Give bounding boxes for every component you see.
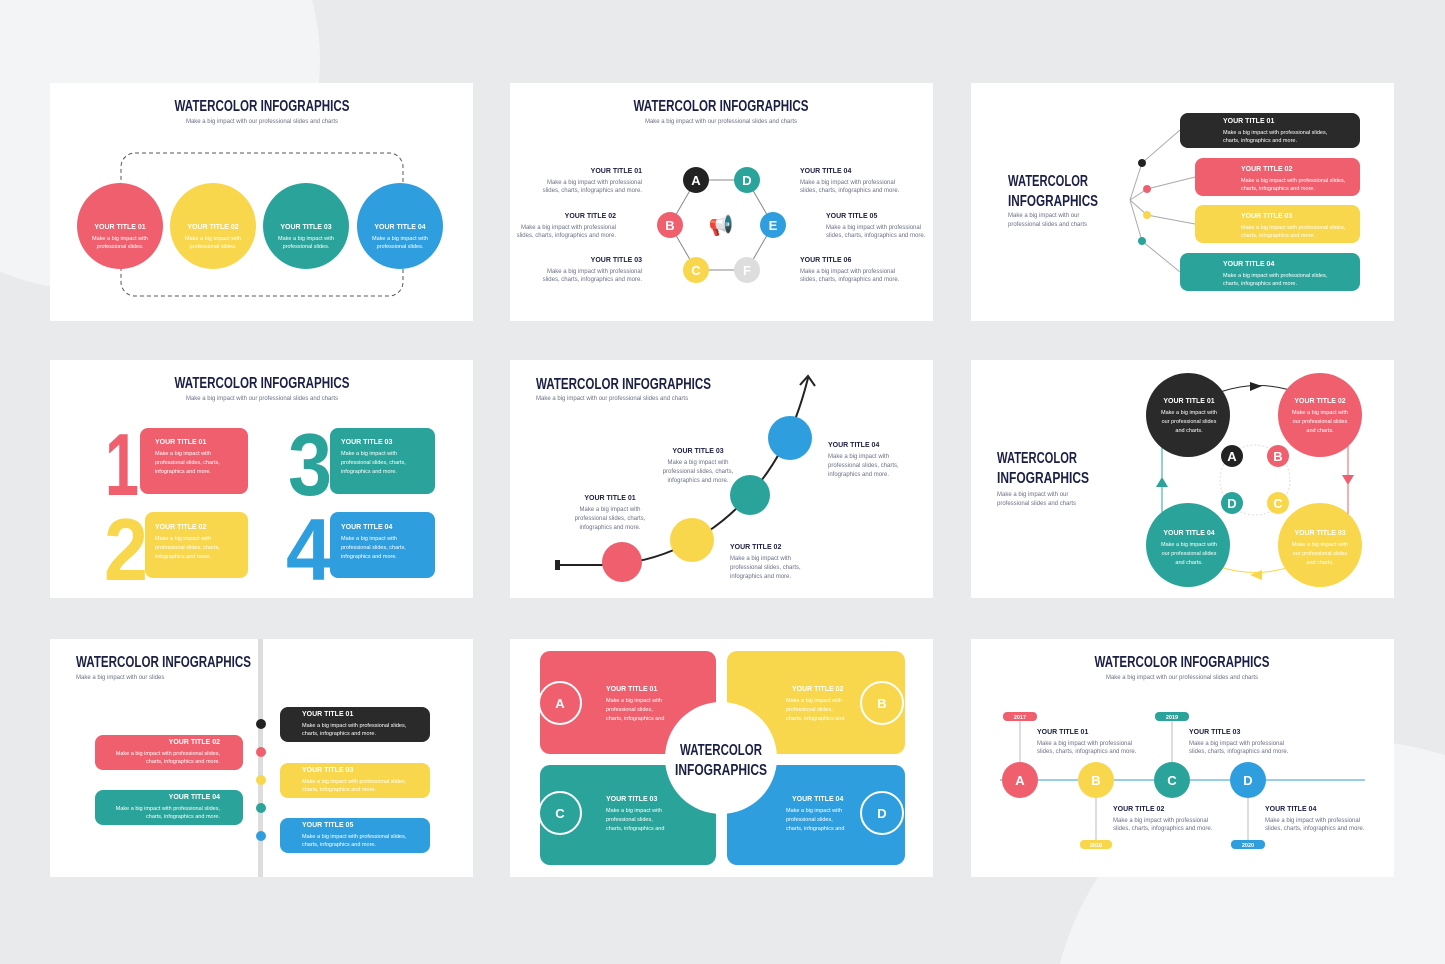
slide 5: growth curve: infographics and more. xyxy=(579,525,641,531)
slide 7: vertical timeline: Make a big impact with our slides xyxy=(76,675,164,681)
slide 7: vertical timeline: Make a big impact with professional slides, xyxy=(302,779,407,785)
slide 4: numbers: infographics and more. xyxy=(155,554,211,560)
slide 3: brush list: charts, infographics and more. xyxy=(1241,186,1315,192)
slide 6: cycle: professional slides and charts xyxy=(997,501,1076,507)
slide 9: horizontal timeline xyxy=(971,639,1394,877)
slide 9: horizontal timeline: C xyxy=(1167,773,1177,788)
slide 6: cycle: YOUR TITLE 02 xyxy=(1294,398,1346,405)
slide 4: numbers xyxy=(50,360,473,599)
slide 7: vertical timeline: YOUR TITLE 03 xyxy=(302,767,353,774)
slide 7: vertical timeline: Make a big impact with professional slides, xyxy=(302,834,407,840)
slide 5: growth curve: Make a big impact with xyxy=(730,556,791,562)
slide 4: numbers: 3 xyxy=(288,415,332,514)
slide 2: hexagon: YOUR TITLE 03 xyxy=(591,257,642,264)
slide 3: brush list: charts, infographics and more. xyxy=(1223,281,1297,287)
slide 5: growth curve: infographics and more. xyxy=(667,478,729,484)
slide 4: numbers: 2 xyxy=(104,500,148,599)
slide 9: horizontal timeline: slides, charts, infographics and more. xyxy=(1113,826,1213,832)
slide 2: hexagon: Make a big impact with professional xyxy=(800,269,895,275)
slide 4: numbers: Make a big impact with xyxy=(341,536,397,542)
slide 5: growth curve: professional slides, charts, xyxy=(663,469,734,475)
slide 9: horizontal timeline: YOUR TITLE 01 xyxy=(1037,729,1088,736)
slide 2: hexagon: slides, charts, infographics and more. xyxy=(826,233,926,239)
slide 5: growth curve: professional slides, charts, xyxy=(575,516,646,522)
slide 4: numbers: infographics and more. xyxy=(155,469,211,475)
slide 5: growth curve: Make a big impact with xyxy=(667,460,729,466)
slide 2: hexagon: slides, charts, infographics and more. xyxy=(543,188,642,194)
slide 6: cycle: Make a big impact with our xyxy=(997,492,1068,498)
slide 3: brush list: professional slides and charts xyxy=(1008,222,1087,228)
slide 7: vertical timeline: YOUR TITLE 01 xyxy=(302,711,353,718)
slide 6: cycle: Make a big impact with xyxy=(1292,542,1348,548)
slide 4: numbers: 4 xyxy=(286,500,332,599)
slide 9: horizontal timeline: Make a big impact with professional xyxy=(1113,818,1208,824)
slide 8: quadrants: professional slides, xyxy=(606,707,653,713)
slide 6: cycle: Make a big impact with xyxy=(1161,542,1217,548)
slide 4: numbers: YOUR TITLE 02 xyxy=(155,524,206,531)
slide 3: brush list xyxy=(971,83,1394,321)
slide 2: hexagon: WATERCOLOR INFOGRAPHICS xyxy=(634,98,809,115)
slide 2: hexagon: D xyxy=(742,173,752,188)
slide 8: quadrants: charts, infographics and xyxy=(786,716,844,722)
slide 9: horizontal timeline: A xyxy=(1015,773,1025,788)
slide 6: cycle: Make a big impact with xyxy=(1292,410,1348,416)
slide 2: hexagon: A xyxy=(691,173,701,188)
slide 1: four circles: YOUR TITLE 01 xyxy=(94,224,146,231)
slide 6: cycle xyxy=(971,360,1394,598)
slide 3: brush list: charts, infographics and more. xyxy=(1241,233,1315,239)
slide 1: four circles: YOUR TITLE 04 xyxy=(374,224,426,231)
slide 7: vertical timeline: charts, infographics and more. xyxy=(146,814,220,820)
slide 7: vertical timeline: Make a big impact with professional slides, xyxy=(116,751,220,757)
slide 4: numbers: YOUR TITLE 03 xyxy=(341,439,392,446)
slide 3: brush list: charts, infographics and more. xyxy=(1223,138,1297,144)
slide 6: cycle: YOUR TITLE 04 xyxy=(1163,530,1215,537)
slide 9: horizontal timeline: YOUR TITLE 03 xyxy=(1189,729,1240,736)
slide 4: numbers: professional slides, charts, xyxy=(341,460,406,466)
slide 7: vertical timeline: WATERCOLOR INFOGRAPHICS xyxy=(76,654,251,671)
slide 8: quadrants: C xyxy=(555,806,565,821)
slide 2: hexagon: YOUR TITLE 02 xyxy=(565,213,616,220)
slide 6: cycle: and charts. xyxy=(1306,560,1334,566)
slide 6: cycle: and charts. xyxy=(1175,428,1203,434)
slide 2: hexagon: Make a big impact with professional xyxy=(547,180,642,186)
slide 7: vertical timeline: YOUR TITLE 02 xyxy=(169,739,220,746)
slide 4: numbers: YOUR TITLE 01 xyxy=(155,439,206,446)
slide 1: four circles: professional slides. xyxy=(97,244,144,250)
slide 3: brush list: YOUR TITLE 01 xyxy=(1223,118,1274,125)
slide 6: cycle: Make a big impact with xyxy=(1161,410,1217,416)
slide 2: hexagon: slides, charts, infographics and more. xyxy=(517,233,616,239)
slide 5: growth curve: infographics and more. xyxy=(828,472,889,478)
slide 1: four circles: Make a big impact with xyxy=(278,236,334,242)
slide 4: numbers: Make a big impact with xyxy=(341,451,397,457)
slide 3: brush list: YOUR TITLE 04 xyxy=(1223,261,1274,268)
slide 8: quadrants: B xyxy=(877,696,887,711)
slide 8: quadrants xyxy=(510,639,933,877)
slide 1: four circles: YOUR TITLE 03 xyxy=(280,224,332,231)
slide 5: growth curve: Make a big impact with xyxy=(828,454,889,460)
slide 2: hexagon: B xyxy=(665,218,675,233)
slide 6: cycle: C xyxy=(1273,496,1283,511)
slide 4: numbers: 1 xyxy=(105,415,139,514)
slide 6: cycle: our professional slides xyxy=(1293,551,1348,557)
slide 9: horizontal timeline: WATERCOLOR INFOGRAPHICS xyxy=(1094,654,1270,671)
slide 9: horizontal timeline: D xyxy=(1243,773,1253,788)
slide 5: growth curve: Make a big impact with xyxy=(579,507,641,513)
slide 8: quadrants: professional slides, xyxy=(786,817,833,823)
slide 8: quadrants: Make a big impact with xyxy=(786,698,842,704)
slide 2: hexagon: E xyxy=(769,218,778,233)
slide 2: hexagon: slides, charts, infographics and more. xyxy=(800,277,900,283)
slide 9: horizontal timeline: Make a big impact with professional xyxy=(1265,818,1360,824)
slide 9: horizontal timeline: YOUR TITLE 04 xyxy=(1265,806,1316,813)
slide 7: vertical timeline: Make a big impact with professional slides, xyxy=(116,806,220,812)
slide 1: four circles: Make a big impact with our professional slides and charts xyxy=(186,119,338,125)
slide 8: quadrants: charts, infographics and xyxy=(606,826,664,832)
slide 7: vertical timeline xyxy=(50,639,473,877)
slide 3: brush list: Make a big impact with our xyxy=(1008,213,1079,219)
slide 7: vertical timeline: charts, infographics and more. xyxy=(302,787,376,793)
slide 5: growth curve: WATERCOLOR INFOGRAPHICS xyxy=(536,376,711,393)
slide 6: cycle: INFOGRAPHICS xyxy=(997,470,1089,487)
slide 8: quadrants: Make a big impact with xyxy=(786,808,842,814)
slide 4: numbers: professional slides, charts, xyxy=(155,545,220,551)
slide 1: four circles: YOUR TITLE 02 xyxy=(187,224,239,231)
slide 6: cycle: WATERCOLOR xyxy=(997,450,1077,467)
slide 5: growth curve: YOUR TITLE 03 xyxy=(672,448,724,455)
slide 9: horizontal timeline: Make a big impact with professional xyxy=(1037,741,1132,747)
slide 8: quadrants: charts, infographics and xyxy=(606,716,664,722)
slide 9: horizontal timeline: Make a big impact with professional xyxy=(1189,741,1284,747)
slide 9: horizontal timeline: B xyxy=(1091,773,1101,788)
slide 9: horizontal timeline: 2017 xyxy=(1014,715,1026,721)
slide 1: four circles: Make a big impact with xyxy=(185,236,241,242)
slide 5: growth curve: YOUR TITLE 04 xyxy=(828,442,879,449)
slide 3: brush list: WATERCOLOR xyxy=(1008,173,1088,190)
slide 8: quadrants: D xyxy=(877,806,887,821)
slide 3: brush list: Make a big impact with professional slides, xyxy=(1241,225,1346,231)
slide 8: quadrants: A xyxy=(555,696,565,711)
slide 7: vertical timeline: charts, infographics and more. xyxy=(302,731,376,737)
slide 2: hexagon: C xyxy=(691,263,701,278)
slide 1: four circles: professional slides. xyxy=(377,244,424,250)
slide 3: brush list: INFOGRAPHICS xyxy=(1008,193,1098,210)
slide 7: vertical timeline: charts, infographics and more. xyxy=(146,759,220,765)
slide 2: hexagon: 📢 xyxy=(709,213,733,237)
slide 6: cycle: B xyxy=(1273,449,1283,464)
slide 7: vertical timeline: charts, infographics and more. xyxy=(302,842,376,848)
slide 5: growth curve: YOUR TITLE 02 xyxy=(730,544,781,551)
slide 6: cycle: YOUR TITLE 03 xyxy=(1294,530,1346,537)
slide 8: quadrants: charts, infographics and xyxy=(786,826,844,832)
slide 4: numbers: infographics and more. xyxy=(341,554,397,560)
slide 1: four circles: professional slides. xyxy=(283,244,330,250)
slide 7: vertical timeline: YOUR TITLE 05 xyxy=(302,822,353,829)
slide 8: quadrants: WATERCOLOR xyxy=(680,742,762,759)
slide 4: numbers: Make a big impact with xyxy=(155,451,211,457)
slide 8: quadrants: YOUR TITLE 01 xyxy=(606,686,657,693)
slide 1: four circles: Make a big impact with xyxy=(92,236,148,242)
slide 2: hexagon: YOUR TITLE 04 xyxy=(800,168,851,175)
slide 5: growth curve: professional slides, charts, xyxy=(730,565,801,571)
slide 6: cycle: A xyxy=(1227,449,1237,464)
slide 2: hexagon xyxy=(510,83,933,321)
slide 1: four circles: Make a big impact with xyxy=(372,236,428,242)
slide 8: quadrants: Make a big impact with xyxy=(606,698,662,704)
slide 2: hexagon: YOUR TITLE 01 xyxy=(591,168,642,175)
slide 2: hexagon: Make a big impact with professional xyxy=(521,225,616,231)
slide 3: brush list: YOUR TITLE 02 xyxy=(1241,166,1292,173)
slide 2: hexagon: F xyxy=(743,263,751,278)
slide 2: hexagon: slides, charts, infographics and more. xyxy=(543,277,642,283)
slide 9: horizontal timeline: Make a big impact with our professional slides and charts xyxy=(1106,675,1258,681)
slide 3: brush list: Make a big impact with professional slides, xyxy=(1223,130,1328,136)
slide 6: cycle: D xyxy=(1227,496,1237,511)
slide 8: quadrants: professional slides, xyxy=(786,707,833,713)
slide 2: hexagon: YOUR TITLE 06 xyxy=(800,257,851,264)
slide 6: cycle: our professional slides xyxy=(1293,419,1348,425)
slide 6: cycle: our professional slides xyxy=(1162,551,1217,557)
slide 6: cycle: and charts. xyxy=(1306,428,1334,434)
title: WATERCOLOR INFOGRAPHICS xyxy=(174,98,350,115)
slide 8: quadrants: Make a big impact with xyxy=(606,808,662,814)
slide 3: brush list: YOUR TITLE 03 xyxy=(1241,213,1292,220)
slide 1: four circles: professional slides. xyxy=(190,244,237,250)
slide 9: horizontal timeline: 2020 xyxy=(1242,843,1254,849)
slide 2: hexagon: slides, charts, infographics and more. xyxy=(800,188,900,194)
slide 7: vertical timeline: YOUR TITLE 04 xyxy=(169,794,220,801)
slide 9: horizontal timeline: 2018 xyxy=(1090,843,1102,849)
slide 4: numbers: professional slides, charts, xyxy=(341,545,406,551)
slide 4: numbers: infographics and more. xyxy=(341,469,397,475)
slide 8: quadrants: INFOGRAPHICS xyxy=(675,762,767,779)
slide 6: cycle: and charts. xyxy=(1175,560,1203,566)
slide 6: cycle: our professional slides xyxy=(1162,419,1217,425)
slide 4: numbers: Make a big impact with xyxy=(155,536,211,542)
slide 6: cycle: YOUR TITLE 01 xyxy=(1163,398,1215,405)
slide 8: quadrants: YOUR TITLE 03 xyxy=(606,796,657,803)
slide 2: hexagon: Make a big impact with professional xyxy=(800,180,895,186)
slide 9: horizontal timeline: 2019 xyxy=(1166,715,1178,721)
slide 9: horizontal timeline: YOUR TITLE 02 xyxy=(1113,806,1164,813)
slide 8: quadrants: professional slides, xyxy=(606,817,653,823)
slide 5: growth curve: YOUR TITLE 01 xyxy=(584,495,636,502)
slide 4: numbers: WATERCOLOR INFOGRAPHICS xyxy=(174,375,350,392)
slide 4: numbers: professional slides, charts, xyxy=(155,460,220,466)
slide 9: horizontal timeline: slides, charts, infographics and more. xyxy=(1189,749,1289,755)
slide 3: brush list: Make a big impact with professional slides, xyxy=(1223,273,1328,279)
slide 5: growth curve: infographics and more. xyxy=(730,574,791,580)
slide 8: quadrants: YOUR TITLE 04 xyxy=(792,796,843,803)
slide 2: hexagon: Make a big impact with professional xyxy=(547,269,642,275)
slide 2: hexagon: YOUR TITLE 05 xyxy=(826,213,877,220)
slide 5: growth curve: professional slides, charts, xyxy=(828,463,899,469)
slide 7: vertical timeline: Make a big impact with professional slides, xyxy=(302,723,407,729)
slide 9: horizontal timeline: slides, charts, infographics and more. xyxy=(1037,749,1137,755)
slide 8: quadrants: YOUR TITLE 02 xyxy=(792,686,843,693)
slide 2: hexagon: Make a big impact with professional xyxy=(826,225,921,231)
slide 5: growth curve: Make a big impact with our professional slides and charts xyxy=(536,396,688,402)
slide 4: numbers: YOUR TITLE 04 xyxy=(341,524,392,531)
slide 1: four circles xyxy=(50,83,473,321)
slide 9: horizontal timeline: slides, charts, infographics and more. xyxy=(1265,826,1365,832)
slide 5: growth curve xyxy=(510,360,933,598)
slide 3: brush list: Make a big impact with professional slides, xyxy=(1241,178,1346,184)
slide 2: hexagon: Make a big impact with our professional slides and charts xyxy=(645,119,797,125)
slide 4: numbers: Make a big impact with our professional slides and charts xyxy=(186,396,338,402)
